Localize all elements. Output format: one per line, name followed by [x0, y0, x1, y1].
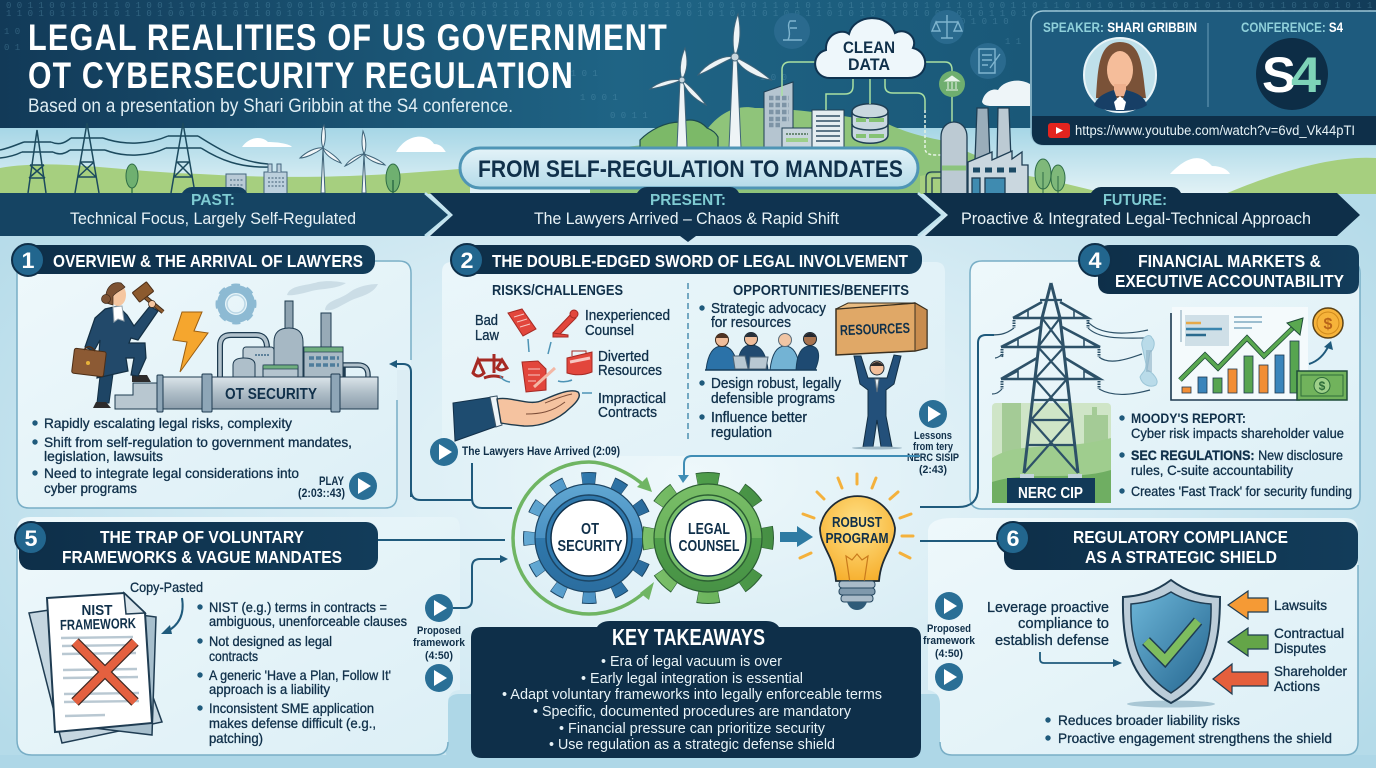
panel 4 bullets: SEC REGULATIONS: New disclosure: [1131, 447, 1343, 463]
play links: proposed framework left: Proposed: [417, 625, 461, 637]
panel 2: the double-edged sword of legal involvement: [430, 244, 959, 476]
panel 1 bullets: cyber programs: [44, 480, 137, 496]
transmission tower: [990, 283, 1150, 473]
key takeaways heading: KEY TAKEAWAYS: [612, 624, 765, 650]
clean data cloud: CLEAN: [843, 39, 895, 57]
threat labels: Shareholder: [1274, 663, 1347, 679]
panel 6 header: [997, 522, 1358, 570]
landscape scene: [0, 107, 1376, 194]
key takeaways list: • Use regulation as a strategic defense shield: [549, 736, 835, 753]
dashed divider: [687, 283, 689, 443]
play links: proposed framework left: (4:50): [425, 650, 453, 662]
risk labels: Bad: [475, 313, 498, 329]
illustration: lawyer climbing onto OT security pipeline: [72, 281, 378, 412]
panel 5 header: THE TRAP OF VOLUNTARY: [100, 527, 304, 547]
panel 1 header: 1: [22, 248, 34, 273]
threat labels: Actions: [1274, 678, 1320, 694]
panel 6 header: AS A STRATEGIC SHIELD: [1085, 547, 1277, 567]
header background with binary pattern: [0, 0, 1376, 128]
pipeline label: OT SECURITY: [225, 386, 317, 403]
open hand: [453, 391, 579, 441]
copy-pasted label and arrow: [130, 579, 203, 634]
youtube icon: [1048, 123, 1070, 138]
copy-pasted label and arrow: Copy-Pasted: [130, 579, 203, 595]
play links: proposed framework right: Proposed: [927, 623, 971, 635]
panel 4 bullets: MOODY'S REPORT:: [1131, 410, 1246, 426]
play link: lessons from NERC SISIP: from tery: [913, 441, 954, 453]
gear: OT security: SECURITY: [558, 538, 623, 555]
risk labels: Inexperienced: [585, 308, 670, 324]
title: OT CYBERSECURITY REGULATION: [28, 54, 574, 96]
header background with binary pattern: 1 0 0: [760, 73, 787, 83]
S4 logo: S: [1262, 47, 1296, 103]
play links: proposed framework right: framework: [923, 635, 976, 647]
panel 6 header: REGULATORY COMPLIANCE: [1073, 527, 1288, 547]
red risk icons: [473, 309, 592, 392]
shield with check mark: [1123, 580, 1220, 708]
threat labels: Disputes: [1274, 640, 1326, 656]
panel 4 header: [1079, 244, 1359, 294]
risk labels: Impractical: [598, 391, 666, 407]
key takeaways list: [502, 653, 882, 753]
panel 4 bullets: [1119, 410, 1352, 499]
youtube url: https://www.youtube.com/watch?v=6vd_Vk44pTI: [1075, 123, 1355, 138]
header background with binary pattern: 0 1: [4, 43, 20, 53]
factory: [926, 81, 1030, 194]
speaker card: [1031, 11, 1376, 145]
play link: 2:03::43: [298, 472, 377, 500]
panel 5: the trap of voluntary frameworks and vague mandates: [15, 517, 460, 755]
panel 5 bullets: contracts: [209, 648, 258, 664]
panel 4 header: EXECUTIVE ACCOUNTABILITY: [1115, 271, 1344, 291]
NIST framework document with red X: FRAMEWORK: [60, 616, 137, 634]
panel 5 header: 5: [24, 526, 38, 551]
city buildings: [764, 82, 888, 148]
resources box carried by man: [836, 303, 927, 450]
opportunities heading: OPPORTUNITIES/BENEFITS: [733, 282, 909, 299]
threat labels: [1274, 597, 1347, 694]
panel 4 header: 4: [1088, 248, 1102, 273]
play link: 2:03::43: (2:03::43): [298, 486, 345, 500]
threat labels: Contractual: [1274, 625, 1344, 641]
key takeaways box: [471, 621, 921, 758]
arrow to shield: [1040, 652, 1114, 663]
panel 5 bullets: makes defense difficult (e.g.,: [209, 715, 376, 731]
gear: legal counsel: LEGAL: [688, 521, 730, 538]
panel 5 bullets: patching): [209, 730, 263, 746]
section banner: FROM SELF-REGULATION TO MANDATES: [478, 156, 903, 183]
speaker portrait: [1084, 38, 1156, 112]
section banner: [460, 148, 918, 188]
title: LEGAL REALITIES OF US GOVERNMENT: [28, 16, 668, 58]
panel 4 header: FINANCIAL MARKETS &: [1138, 251, 1321, 271]
opportunities bullets: defensible programs: [711, 391, 835, 407]
panel 5 bullets: [197, 599, 407, 746]
arrow from gears to bulb: [780, 526, 813, 547]
attack arrows: [1213, 591, 1268, 694]
panel 6 bullets: [1045, 712, 1332, 746]
timeline: future: Proactive & Integrated Legal-Technical Approach: [961, 210, 1311, 228]
timeline: present: [430, 187, 943, 242]
bottom background patches: [0, 694, 1376, 768]
play link: lessons from NERC SISIP: (2:43): [919, 464, 947, 476]
opportunities bullets: Strategic advocacy: [711, 301, 827, 317]
coin icon: $: [1324, 316, 1333, 333]
leverage text: compliance to: [1018, 615, 1109, 632]
risk labels: Resources: [598, 363, 662, 379]
financial bar chart: [1171, 307, 1333, 400]
panel 1 bullets: Rapidly escalating legal risks, complexity: [44, 415, 292, 431]
header background with binary pattern: 1 0: [4, 27, 20, 37]
timeline: future: FUTURE:: [1103, 192, 1167, 209]
large wind turbines: [650, 14, 771, 148]
factory trees: [1035, 159, 1065, 193]
damaged insulator: [1140, 336, 1157, 386]
panel 1 header: [12, 244, 375, 276]
resources box carried by man: RESOURCES: [840, 321, 911, 339]
connector lines: [378, 335, 998, 608]
key takeaways list: • Financial pressure can prioritize security: [559, 720, 825, 737]
timeline: future: [923, 187, 1360, 236]
risks heading: RISKS/CHALLENGES: [492, 282, 623, 299]
panel 1 bullets: legislation, lawsuits: [44, 448, 163, 464]
panel 5 header: [15, 522, 378, 570]
light bulb: robust program: [800, 474, 913, 610]
gear: OT security: [524, 473, 654, 603]
panel 5 header: FRAMEWORKS & VAGUE MANDATES: [62, 547, 342, 567]
panel 5 bullets: Inconsistent SME application: [209, 700, 374, 716]
header background with binary pattern: 0 0 1 1: [610, 111, 648, 121]
leverage text: Leverage proactive: [987, 599, 1109, 616]
S4 logo: [1256, 38, 1328, 110]
team at table illustration: [705, 332, 819, 370]
key takeaways list: • Adapt voluntary frameworks into legally enforceable terms: [502, 686, 882, 703]
threat labels: Lawsuits: [1274, 597, 1327, 613]
play link: the lawyers have arrived: [430, 438, 620, 466]
S4 logo: 4: [1291, 47, 1321, 103]
opportunities bullets: for resources: [711, 315, 791, 331]
opportunities bullets: Design robust, legally: [711, 376, 842, 392]
panel 4 bullets: rules, C-suite accountability: [1131, 462, 1293, 478]
key takeaways list: • Early legal integration is essential: [581, 670, 803, 687]
central cycle arrows: [513, 462, 654, 614]
coin icon: [1313, 308, 1343, 338]
opportunities bullets: [699, 301, 842, 441]
panel 5 bullets: NIST (e.g.) terms in contracts =: [209, 599, 387, 615]
play links: proposed framework left: framework: [413, 637, 466, 649]
opportunities bullets: Influence better: [711, 410, 807, 426]
NIST framework document with red X: [29, 593, 162, 743]
panel 5 bullets: A generic 'Have a Plan, Follow It': [209, 667, 391, 683]
small wind turbines: [300, 125, 385, 193]
play link: lessons from NERC SISIP: [907, 400, 959, 476]
NIST framework document with red X: NIST: [82, 603, 113, 619]
play link: the lawyers have arrived: The Lawyers Have Arrived (2:09): [462, 444, 620, 458]
panel 2 header: THE DOUBLE-EDGED SWORD OF LEGAL INVOLVEMENT: [492, 251, 908, 271]
title: [28, 16, 668, 96]
panel 4 bullets: Creates 'Fast Track' for security funding: [1131, 483, 1352, 499]
small tree and buildings: [126, 164, 400, 194]
risk labels: Contracts: [598, 405, 657, 421]
subtitle: Based on a presentation by Shari Gribbin at the S4 conference.: [28, 95, 513, 117]
risk labels: Law: [475, 328, 499, 344]
timeline: past: [0, 187, 450, 236]
header background with binary pattern: 1 0 0 1: [580, 93, 618, 103]
speaker label: SPEAKER: SHARI GRIBBIN: [1043, 20, 1197, 35]
key takeaways list: • Specific, documented procedures are mandatory: [533, 703, 851, 720]
conference label: CONFERENCE: S4: [1241, 20, 1343, 35]
panel 5 bullets: approach is a liability: [209, 681, 330, 697]
clean data cloud: [815, 18, 925, 78]
panel 4: financial markets and executive accountability: [970, 244, 1360, 509]
NERC CIP green backdrop: [992, 403, 1111, 503]
timeline: present: PRESENT:: [650, 192, 726, 209]
risk labels: [475, 308, 670, 421]
risk labels: Counsel: [585, 323, 634, 339]
panel 5 bullets: ambiguous, unenforceable clauses: [209, 613, 407, 629]
timeline: past: Technical Focus, Largely Self-Regulated: [70, 210, 356, 228]
panel 2 header: 2: [460, 248, 474, 273]
leverage text: establish defense: [995, 632, 1109, 649]
data connection lines: [782, 62, 952, 155]
header background with binary pattern: 0 1 0 1 0: [960, 17, 1009, 27]
panel 1 bullets: Shift from self-regulation to government mandates,: [44, 434, 352, 450]
panel 1 header: OVERVIEW & THE ARRIVAL OF LAWYERS: [53, 251, 363, 271]
header background with binary pattern: 0 1 0 1: [560, 69, 598, 79]
panel 6: regulatory compliance as a strategic shield: [928, 518, 1358, 755]
banknote icon: $: [1319, 379, 1326, 393]
header background with binary pattern: 1 1: [1005, 37, 1021, 47]
leverage text: [987, 599, 1109, 649]
play links: proposed framework right: [923, 592, 976, 691]
banknote icon: [1297, 371, 1347, 400]
NERC CIP label: [1007, 474, 1095, 503]
gear: legal counsel: [639, 469, 777, 607]
key takeaways list: • Era of legal vacuum is over: [601, 653, 782, 670]
light bulb: robust program: ROBUST: [832, 514, 882, 531]
gear: OT security: OT: [581, 521, 599, 538]
panel 1 bullets: [32, 415, 352, 496]
play link: lessons from NERC SISIP: Lessons: [914, 430, 952, 442]
panel 1: overview and the arrival of lawyers: [12, 244, 411, 508]
panel 6 bullets: Proactive engagement strengthens the shield: [1058, 730, 1332, 746]
floating icons: [774, 10, 1006, 97]
light bulb: robust program: PROGRAM: [826, 530, 888, 547]
opportunities bullets: regulation: [711, 425, 772, 441]
clean data cloud: DATA: [848, 56, 890, 74]
panel 6 header: 6: [1006, 526, 1020, 551]
play links: proposed framework left: [413, 594, 466, 692]
risk labels: Diverted: [598, 349, 649, 365]
gear: legal counsel: COUNSEL: [678, 538, 740, 555]
timeline: past: PAST:: [191, 192, 235, 209]
panel 6 bullets: Reduces broader liability risks: [1058, 712, 1240, 728]
panel 5 bullets: Not designed as legal: [209, 633, 332, 649]
panel 2 header: [451, 244, 922, 276]
play links: proposed framework right: (4:50): [935, 648, 963, 660]
panel 4 bullets: Cyber risk impacts shareholder value: [1131, 425, 1344, 441]
NERC CIP label: NERC CIP: [1018, 485, 1083, 502]
timeline: present: The Lawyers Arrived – Chaos & Rapid Shift: [534, 210, 839, 228]
play link: 2:03::43: PLAY: [319, 474, 344, 488]
play link: lessons from NERC SISIP: NERC SISIP: [907, 452, 959, 464]
power pylons: [0, 123, 270, 193]
risk flow arrows: [500, 339, 592, 393]
panel 1 bullets: Need to integrate legal considerations into: [44, 465, 299, 481]
